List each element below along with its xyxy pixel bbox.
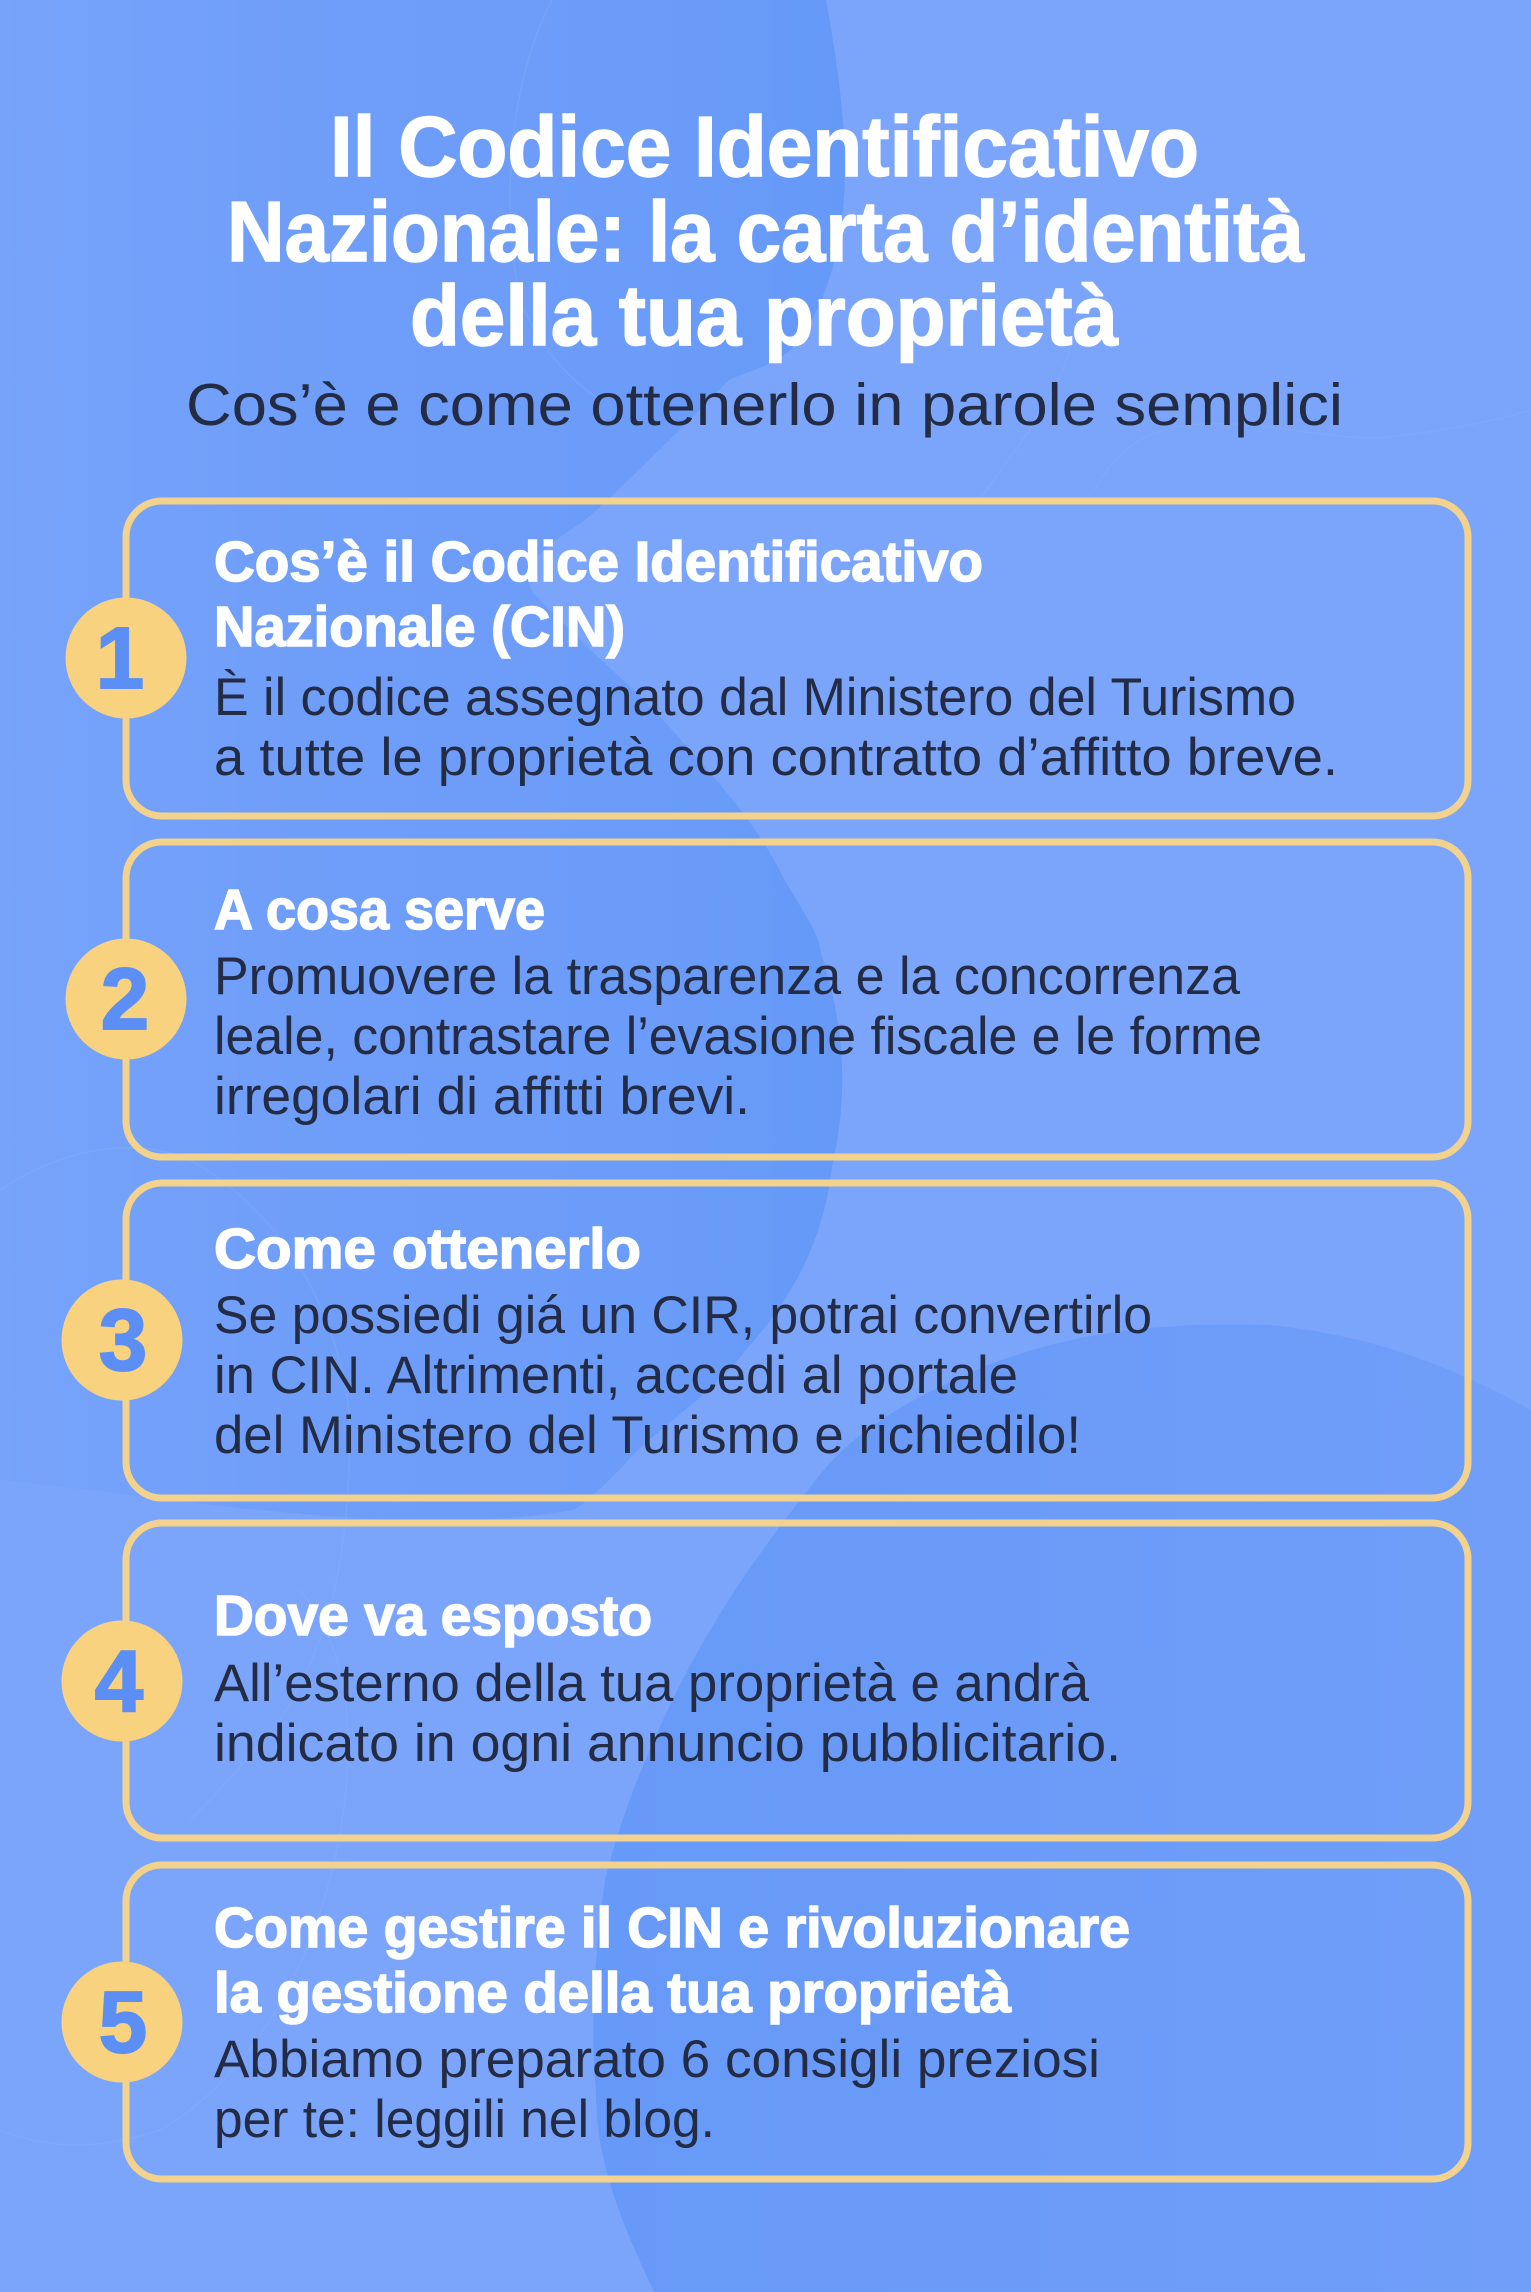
panel: step 1: a tutte le proprietà con contratto d’affitto breve.: [214, 728, 1338, 787]
title: Il Codice Identificativo: [330, 100, 1199, 195]
panel: step 3: in CIN. Altrimenti, accedi al portale: [214, 1346, 1018, 1405]
title: della tua proprietà: [410, 269, 1119, 364]
panel: step 1: È il codice assegnato dal Ministero del Turismo: [214, 668, 1296, 727]
panel: step 3: 3: [99, 1292, 147, 1389]
panel: step 1: Nazionale (CIN): [214, 595, 625, 659]
panel: step 2: irregolari di affitti brevi.: [214, 1067, 750, 1126]
subtitle: Cos’è e come ottenerlo in parole semplici: [186, 372, 1343, 438]
panel: step 4: All’esterno della tua proprietà e andrà: [214, 1654, 1090, 1713]
panel: step 5: Abbiamo preparato 6 consigli preziosi: [214, 2030, 1100, 2089]
panel: step 5: per te: leggili nel blog.: [214, 2090, 715, 2149]
panel: step 2: A cosa serve: [214, 878, 545, 942]
panel: step 1: [66, 501, 1468, 816]
panel: step 3: Se possiedi giá un CIR, potrai convertirlo: [214, 1286, 1152, 1345]
panel: step 2: 2: [101, 951, 149, 1048]
panel: step 5: [62, 1865, 1468, 2179]
panel: step 1: Cos’è il Codice Identificativo: [214, 530, 983, 594]
panel: step 5: la gestione della tua proprietà: [214, 1961, 1011, 2025]
title: [227, 100, 1305, 364]
panel: step 4: Dove va esposto: [214, 1584, 652, 1648]
panel: step 4: indicato in ogni annuncio pubblicitario.: [214, 1714, 1121, 1773]
panel: step 5: 5: [99, 1974, 147, 2071]
panel: step 1: 1: [96, 610, 144, 707]
panel: step 2: [66, 842, 1468, 1157]
panel: step 4: 4: [95, 1633, 143, 1730]
title: Nazionale: la carta d’identità: [227, 185, 1305, 280]
panel: step 2: leale, contrastare l’evasione fiscale e le forme: [214, 1007, 1262, 1066]
panel: step 2: Promuovere la trasparenza e la concorrenza: [214, 947, 1241, 1006]
panel: step 3: [62, 1183, 1468, 1498]
panel: step 3: Come ottenerlo: [214, 1217, 641, 1281]
panel: step 4: [62, 1523, 1468, 1838]
panel: step 3: del Ministero del Turismo e richiedilo!: [214, 1406, 1081, 1465]
panel: step 5: Come gestire il CIN e rivoluzionare: [214, 1896, 1130, 1960]
